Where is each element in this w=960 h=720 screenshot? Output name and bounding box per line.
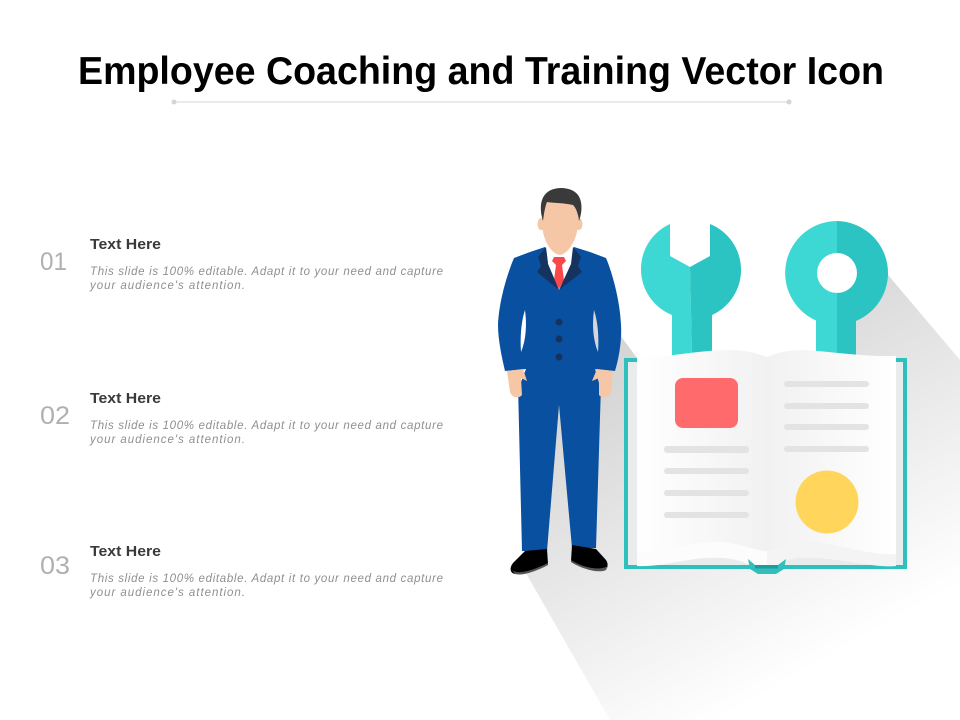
red block [675,378,738,428]
body text 01: your audience's attention. [89,280,245,292]
left page text lines [664,446,749,518]
left shoe sole [512,563,548,575]
left jacket slit [521,310,526,352]
trousers [518,385,601,551]
hair [541,188,582,221]
face [542,198,578,255]
body text 03: your audience's attention. [89,587,245,599]
right page text lines [784,381,869,452]
long shadow [527,275,960,720]
heading 02: Text Here [90,391,161,407]
body text 01: This slide is 100% editable. Adapt it to your need and capture [90,266,443,278]
body text 03 [89,573,443,599]
number 02: 02 [40,402,70,430]
left page bottom fold [637,542,767,566]
left shoe [511,549,548,574]
right lapel [559,247,582,290]
right page bottom fold [767,541,896,566]
left hand [507,369,527,397]
icon: key [785,221,888,356]
title: Employee Coaching and Training Vector Icon [78,50,884,93]
neck and shirt [546,246,574,290]
ear right [576,218,582,230]
title divider [172,100,792,104]
jacket buttons [556,318,562,360]
right jacket slit [593,310,598,352]
body text 03: This slide is 100% editable. Adapt it to your need and capture [90,573,443,585]
book inner edge [628,362,903,565]
right hand [592,369,613,397]
body text 02: This slide is 100% editable. Adapt it to your need and capture [90,420,443,432]
right shoe [571,545,608,571]
yellow circle [796,470,858,534]
right page [767,350,896,556]
suit jacket [498,247,621,390]
ear left [538,218,544,230]
body text 01 [89,266,443,292]
heading 03: Text Here [90,544,161,560]
body text 02 [89,420,443,446]
body text 02: your audience's attention. [89,434,245,446]
book cover [624,358,907,569]
item 01 [40,237,443,292]
spine tab [748,559,786,574]
number 01: 01 [40,248,67,276]
icon: wrench [641,224,741,356]
heading 01: Text Here [90,237,161,253]
left lapel [537,247,559,290]
number 03: 03 [40,552,70,580]
icon: open book [624,350,907,574]
item 03 [40,544,443,599]
tie [552,257,566,289]
left page [637,350,767,556]
right shoe sole [571,560,608,571]
item 02 [40,391,443,446]
figure: businessman [498,188,621,575]
